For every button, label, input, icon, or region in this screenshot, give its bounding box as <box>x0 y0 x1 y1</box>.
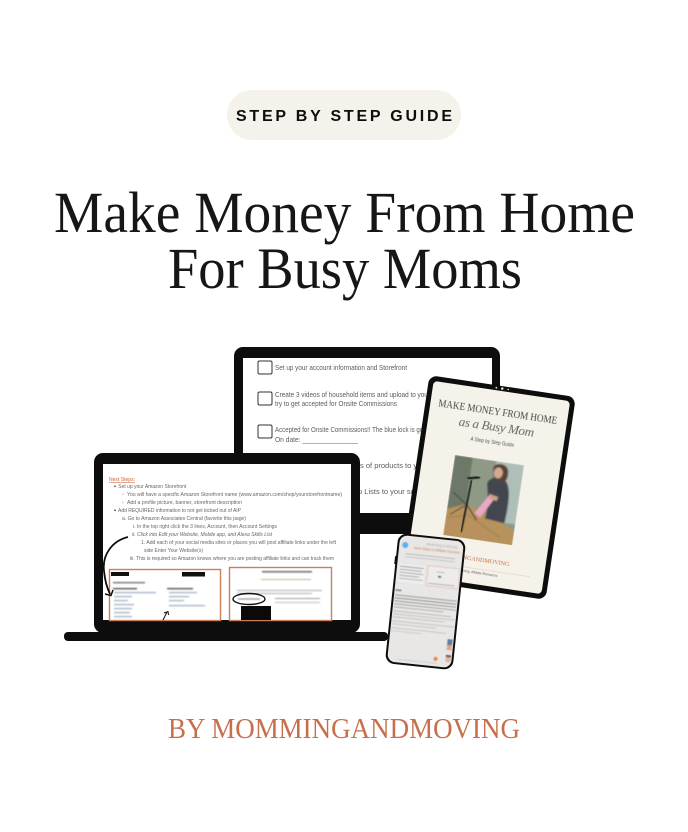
phone header <box>401 540 461 563</box>
badge: step by step guide <box>227 90 461 140</box>
laptop screen notes: ◦ <box>122 492 124 498</box>
phone <box>384 533 466 670</box>
laptop screen notes: side Enter Your Website(s) <box>144 548 203 554</box>
tablet cover subtitle: A Step by Step Guide <box>470 436 515 449</box>
laptop screen notes: i. In the top right click the 3 lines, Account, then Account Settings <box>133 524 277 530</box>
laptop screen notes: 1. Add each of your social media sites or places you will post affiliate links under the left <box>141 540 336 546</box>
right screenshot <box>230 568 332 620</box>
phone side thumbnails <box>445 639 453 662</box>
tablet cover brand: MOMMINGANDMOVING <box>440 552 510 568</box>
back monitor with checklist: On date: _______________ <box>275 435 359 444</box>
back monitor with checklist <box>234 347 500 534</box>
curved arrow <box>104 537 128 596</box>
laptop screen notes: Next Steps: <box>109 477 135 483</box>
laptop screen notes: ii. Click into Edit your Website, Mobile app, and Alexa Skills List <box>132 532 272 538</box>
laptop screen notes: Set up your Amazon Storefront <box>118 484 187 490</box>
laptop screen notes: You will have a specific Amazon Storefront name (www.amazon.com/shop/yourstorefrontname) <box>127 492 342 498</box>
tablet <box>399 375 576 600</box>
title <box>54 180 635 301</box>
back monitor with checklist: Add a minimum of 15 lists of products to your <box>278 461 428 470</box>
title: Make Money From Home <box>54 180 635 245</box>
back monitor with checklist: try to get accepted for Onsite Commissions <box>275 399 397 408</box>
back monitor with checklist: Accepted for Onsite Commissions!! The blue lock is gone <box>275 425 430 434</box>
phone summary cards <box>396 562 460 589</box>
laptop <box>64 453 388 641</box>
laptop screen notes <box>109 477 342 562</box>
laptop screen notes: a. Go to Amazon Associates Central (favorite this page) <box>122 516 246 522</box>
byline: BY MOMMINGANDMOVING <box>168 713 520 745</box>
tablet cover footer <box>438 563 530 583</box>
title: For Busy Moms <box>168 236 522 301</box>
phone header: Momming & Moving <box>426 542 458 550</box>
left screenshot <box>110 570 220 620</box>
tablet cover script: as a Busy Mom <box>458 414 535 440</box>
small arrow <box>163 612 168 620</box>
back monitor with checklist: Set up your account information and Storefront <box>275 363 408 372</box>
laptop screen notes: ◦ <box>122 500 124 506</box>
back monitor with checklist: Create 3 videos of household items and upload to your <box>275 390 430 399</box>
phone header: Next Steps to Affiliate Success <box>414 546 460 555</box>
phone orange button <box>433 657 438 661</box>
phone article text <box>391 589 457 638</box>
tablet cover title: MAKE MONEY FROM HOME <box>438 397 558 427</box>
back monitor with checklist: Share your Shop Lists to your social <box>306 487 426 496</box>
laptop screen notes: Add REQUIRED information to not get kicked out of AIP <box>118 508 241 514</box>
tablet cover photo <box>443 455 524 546</box>
badge: step by step guide: STEP BY STEP GUIDE <box>236 108 452 125</box>
tablet cover footer: Momming and Moving, Affiliate Resources <box>438 565 498 578</box>
laptop screen notes: iii. This is required so Amazon knows where you are posting affiliate links and can track them <box>130 556 334 562</box>
laptop screen notes: Add a profile picture, banner, storefront description <box>127 500 242 506</box>
